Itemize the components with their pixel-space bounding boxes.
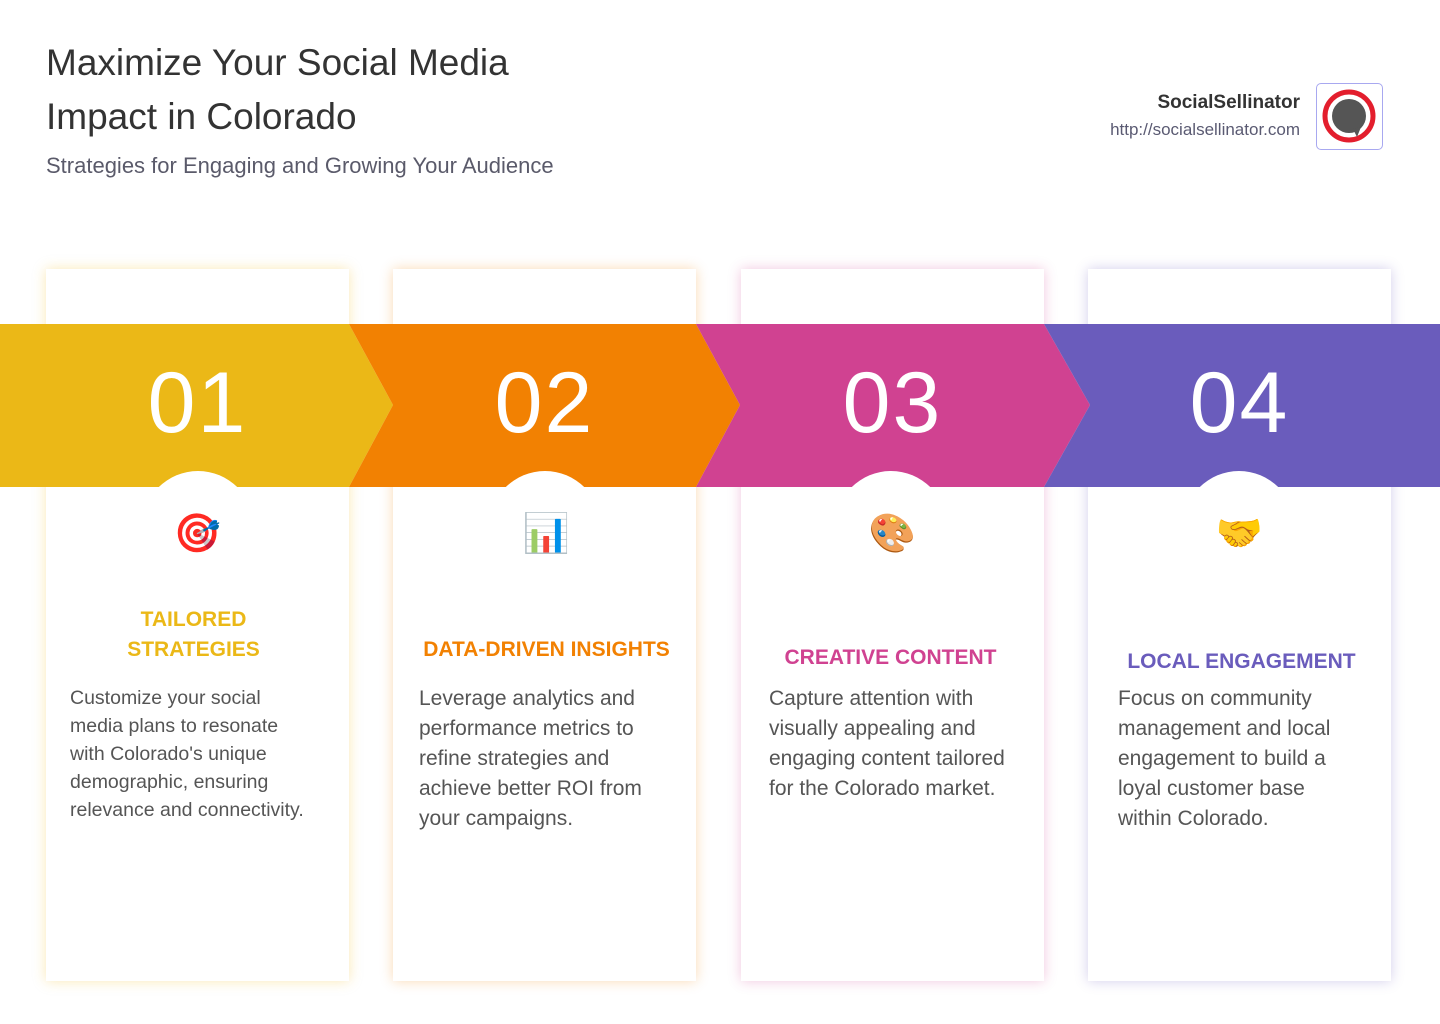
text: 🎨: [869, 513, 916, 555]
numbers: 01: [148, 355, 247, 451]
text: 📊: [523, 513, 570, 555]
brand: SocialSellinator: [1157, 92, 1300, 113]
icons: 🎯: [174, 513, 221, 555]
brand: [1110, 92, 1300, 139]
text: 03: [843, 355, 942, 451]
headings: [127, 608, 260, 661]
text: 02: [495, 355, 594, 451]
text: CREATIVE CONTENT: [785, 646, 996, 669]
cards: [46, 269, 349, 981]
headings: STRATEGIES: [127, 638, 260, 661]
title: Impact in Colorado: [46, 96, 357, 137]
text: LOCAL ENGAGEMENT: [1127, 650, 1356, 673]
brand: http://socialsellinator.com: [1110, 120, 1300, 139]
text: Focus on community management and local engagement to build a loyal customer base within Colorado.: [1118, 687, 1330, 830]
title: [46, 42, 509, 137]
text: 🤝: [1216, 513, 1263, 555]
title: Maximize Your Social Media: [46, 42, 509, 83]
text: Capture attention with visually appealing and engaging content tailored for the Colorado market.: [769, 687, 1005, 800]
texts: Customize your social media plans to resonate with Colorado's unique demographic, ensuring relevance and connectivity.: [70, 687, 304, 821]
subtitle: Strategies for Engaging and Growing Your Audience: [46, 153, 554, 178]
headings: TAILORED: [141, 608, 246, 631]
text: 04: [1190, 355, 1289, 451]
text: DATA-DRIVEN INSIGHTS: [423, 638, 670, 661]
text: Leverage analytics and performance metrics to refine strategies and achieve better ROI from your campaigns.: [419, 687, 642, 830]
logo: [1316, 83, 1383, 150]
